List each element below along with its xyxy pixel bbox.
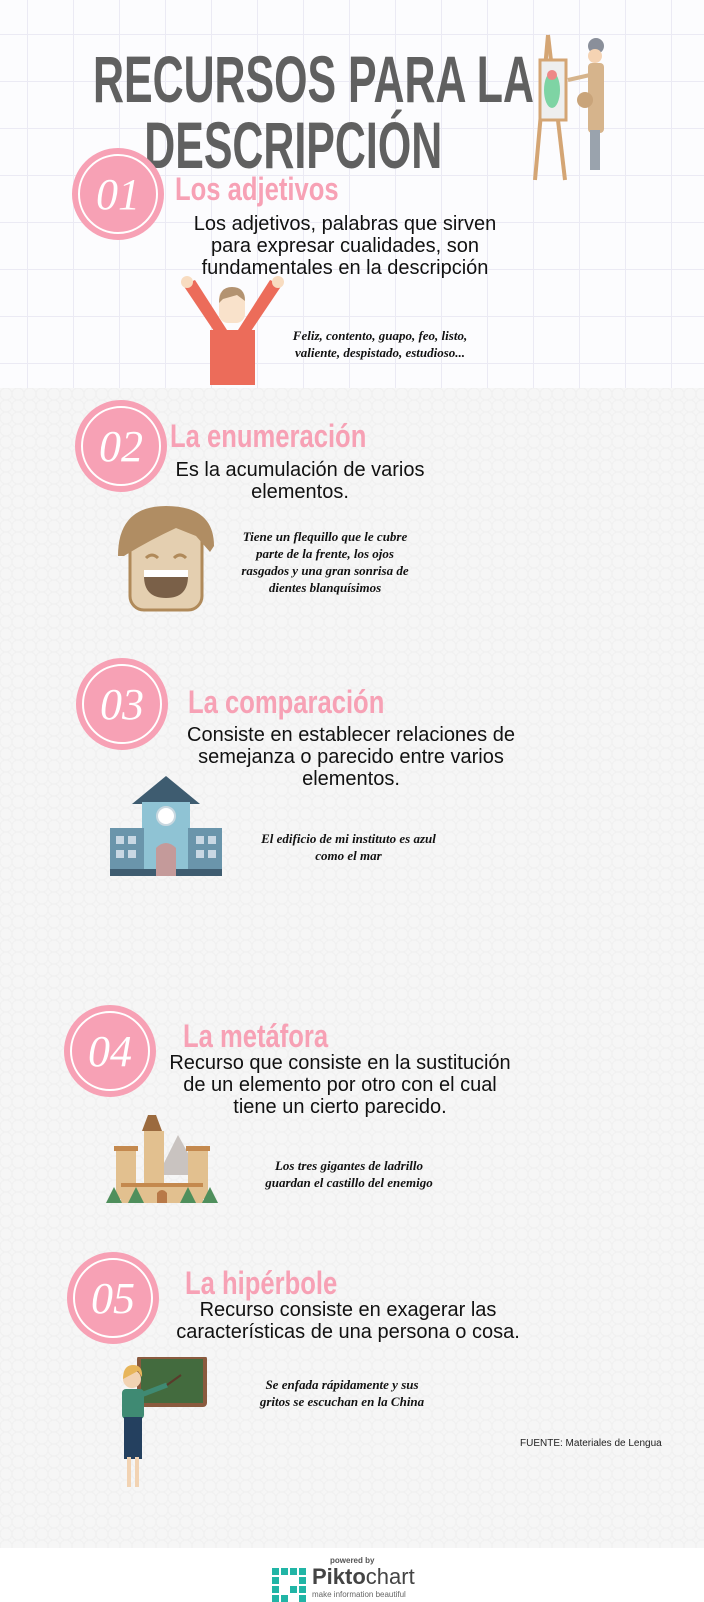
example 04: guardan el castillo del enemigo bbox=[265, 1175, 433, 1190]
example 02: parte de la frente, los ojos bbox=[256, 546, 394, 561]
body 03 bbox=[187, 724, 515, 790]
icon: painter bbox=[533, 34, 604, 180]
example 04: Los tres gigantes de ladrillo bbox=[275, 1158, 423, 1173]
body 01 bbox=[194, 213, 496, 279]
badge 04 bbox=[64, 1005, 156, 1097]
body 04 bbox=[169, 1052, 511, 1118]
footer: piktochart logo bbox=[272, 1556, 415, 1602]
body 01: fundamentales en la descripción bbox=[202, 257, 488, 279]
example 04 bbox=[265, 1158, 433, 1190]
example 05: gritos se escuchan en la China bbox=[260, 1394, 424, 1409]
example 05: Se enfada rápidamente y sus bbox=[265, 1377, 419, 1392]
badge 03 bbox=[76, 658, 168, 750]
example 03 bbox=[261, 831, 436, 863]
body 02 bbox=[175, 459, 424, 503]
body 02: elementos. bbox=[251, 481, 349, 503]
badge 04: 04 bbox=[88, 1027, 132, 1076]
icon: teacher bbox=[122, 1357, 207, 1487]
badge 01: 01 bbox=[96, 170, 140, 219]
title: DESCRIPCIÓN bbox=[144, 108, 442, 182]
example 03: El edificio de mi instituto es azul bbox=[261, 831, 436, 846]
example 01: Feliz, contento, guapo, feo, listo, bbox=[293, 328, 467, 343]
heading 01: Los adjetivos bbox=[175, 171, 339, 207]
badge 03: 03 bbox=[100, 680, 144, 729]
example 02: rasgados y una gran sonrisa de bbox=[241, 563, 409, 578]
example 03: como el mar bbox=[315, 848, 382, 863]
body 02: Es la acumulación de varios bbox=[175, 459, 424, 481]
body 03: Consiste en establecer relaciones de bbox=[187, 724, 515, 746]
footer: piktochart logo: Piktochart bbox=[312, 1564, 415, 1589]
body 01: para expresar cualidades, son bbox=[211, 235, 479, 257]
title: RECURSOS PARA LA bbox=[93, 42, 534, 116]
icon: happy person bbox=[181, 276, 284, 385]
body 04: de un elemento por otro con el cual bbox=[183, 1074, 497, 1096]
badge 05: 05 bbox=[91, 1274, 135, 1323]
badge 01 bbox=[72, 148, 164, 240]
example 01: valiente, despistado, estudioso... bbox=[295, 345, 465, 360]
section 03 bbox=[76, 658, 515, 876]
heading 02: La enumeración bbox=[170, 418, 366, 454]
body 05: características de una persona o cosa. bbox=[176, 1321, 520, 1343]
text: powered by bbox=[330, 1556, 374, 1565]
body 04: tiene un cierto parecido. bbox=[233, 1096, 447, 1118]
title bbox=[93, 42, 534, 182]
icon: castle bbox=[106, 1115, 218, 1203]
section 04 bbox=[64, 1005, 511, 1203]
heading 04: La metáfora bbox=[183, 1018, 328, 1054]
badge 02 bbox=[75, 400, 167, 492]
section 05 bbox=[67, 1252, 520, 1487]
source note: FUENTE: Materiales de Lengua bbox=[520, 1438, 662, 1449]
example 02: dientes blanquísimos bbox=[269, 580, 381, 595]
body 03: elementos. bbox=[302, 768, 400, 790]
section 01 bbox=[72, 148, 496, 385]
example 02: Tiene un flequillo que le cubre bbox=[243, 529, 407, 544]
body 05: Recurso consiste en exagerar las bbox=[200, 1299, 496, 1321]
body 03: semejanza o parecido entre varios bbox=[198, 746, 504, 768]
icon: school building bbox=[110, 776, 222, 876]
example 01 bbox=[292, 328, 467, 360]
badge 05 bbox=[67, 1252, 159, 1344]
icon: smiling face bbox=[118, 506, 214, 612]
body 05 bbox=[176, 1299, 520, 1343]
example 05 bbox=[260, 1377, 424, 1409]
example 02 bbox=[241, 529, 409, 595]
section 02 bbox=[75, 400, 424, 612]
icon: piktochart mark bbox=[272, 1568, 306, 1602]
body 04: Recurso que consiste en la sustitución bbox=[169, 1052, 511, 1074]
heading 05: La hipérbole bbox=[185, 1265, 337, 1301]
badge 02: 02 bbox=[99, 422, 143, 471]
heading 03: La comparación bbox=[188, 684, 384, 720]
footer: piktochart logo: make information beautiful bbox=[312, 1590, 406, 1599]
body 01: Los adjetivos, palabras que sirven bbox=[194, 213, 496, 235]
